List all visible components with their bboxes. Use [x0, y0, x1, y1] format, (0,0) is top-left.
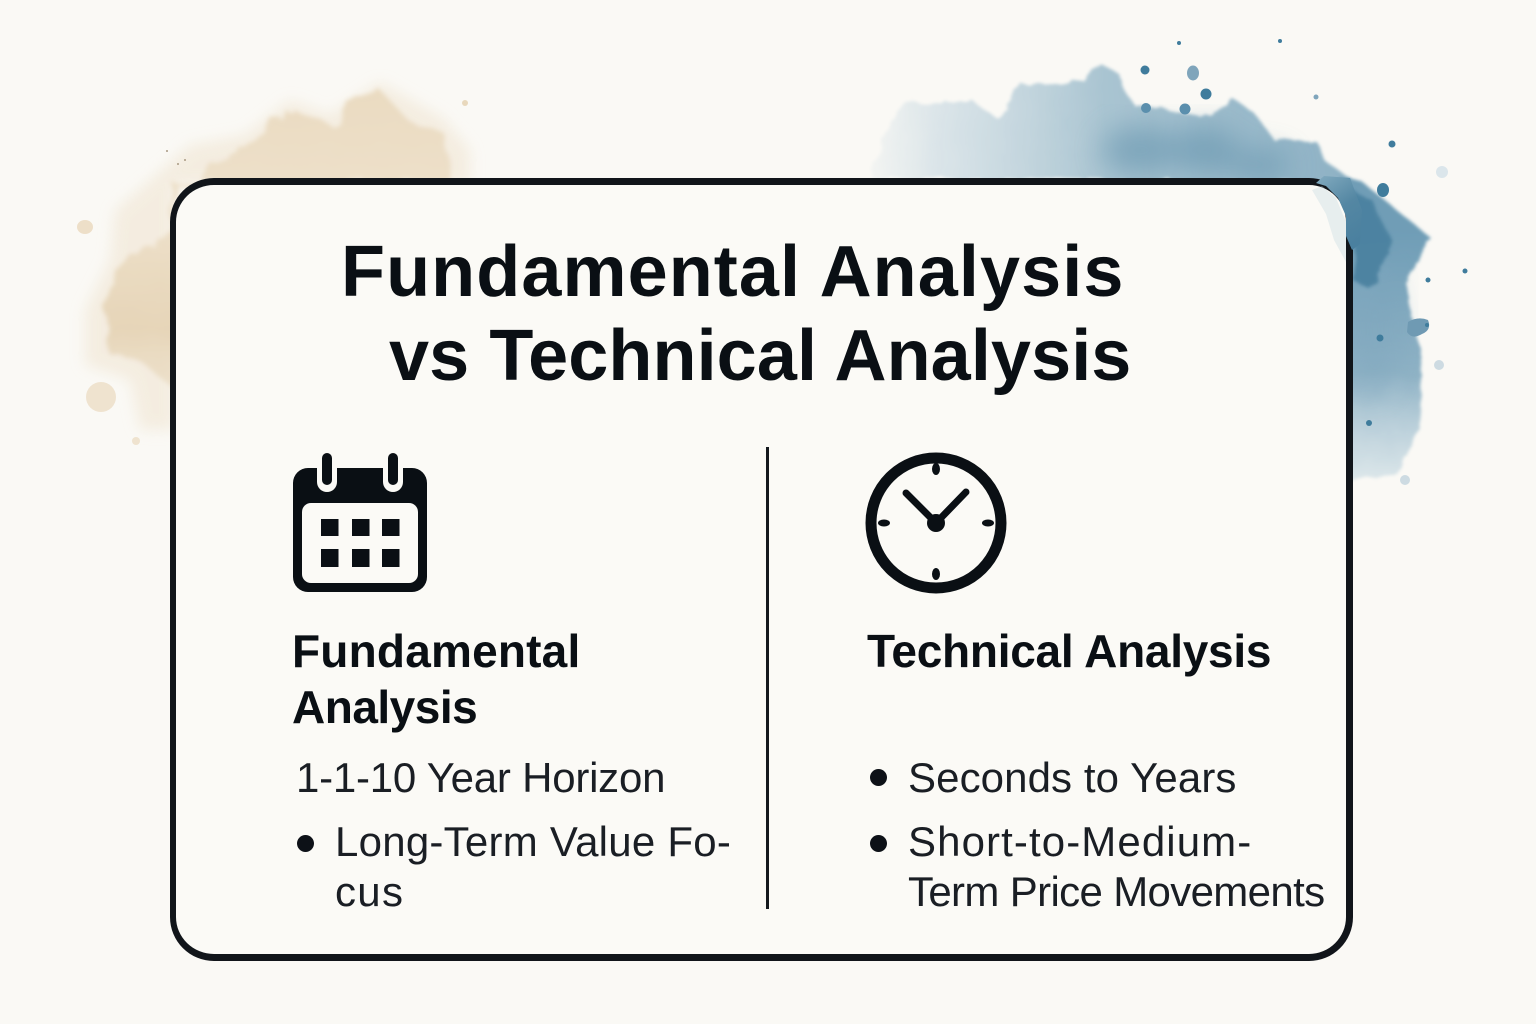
left column heading: [292, 625, 580, 733]
right column bullet: time range: Seconds to Years: [908, 754, 1237, 801]
left column bullet: [297, 818, 731, 915]
left column horizon: 1-1-10 Year Horizon: [296, 754, 665, 801]
right column bullet: focus: Term Price Movements: [908, 868, 1324, 915]
splash: tan: [77, 82, 470, 445]
paint specks: [1140, 39, 1468, 485]
title: [341, 232, 1131, 396]
icon: calendar: [293, 453, 427, 592]
main card: [170, 178, 1353, 961]
left column bullet: cus: [335, 868, 404, 915]
left column heading: Fundamental: [292, 625, 580, 677]
right column heading: Technical Analysis: [867, 625, 1271, 677]
right column bullet: focus: Short-to-Medium-: [908, 818, 1252, 865]
title: vs Technical Analysis: [389, 316, 1131, 396]
divider: [766, 447, 769, 909]
left column heading: Analysis: [292, 681, 477, 733]
splash: blue: [872, 62, 1430, 482]
right column bullet: focus: [870, 818, 1324, 915]
left column bullet: Long-Term Value Fo-: [335, 818, 731, 865]
title: Fundamental Analysis: [341, 232, 1125, 312]
icon: clock: [866, 452, 1006, 594]
splash: blue wash over card corner: [1312, 176, 1356, 262]
